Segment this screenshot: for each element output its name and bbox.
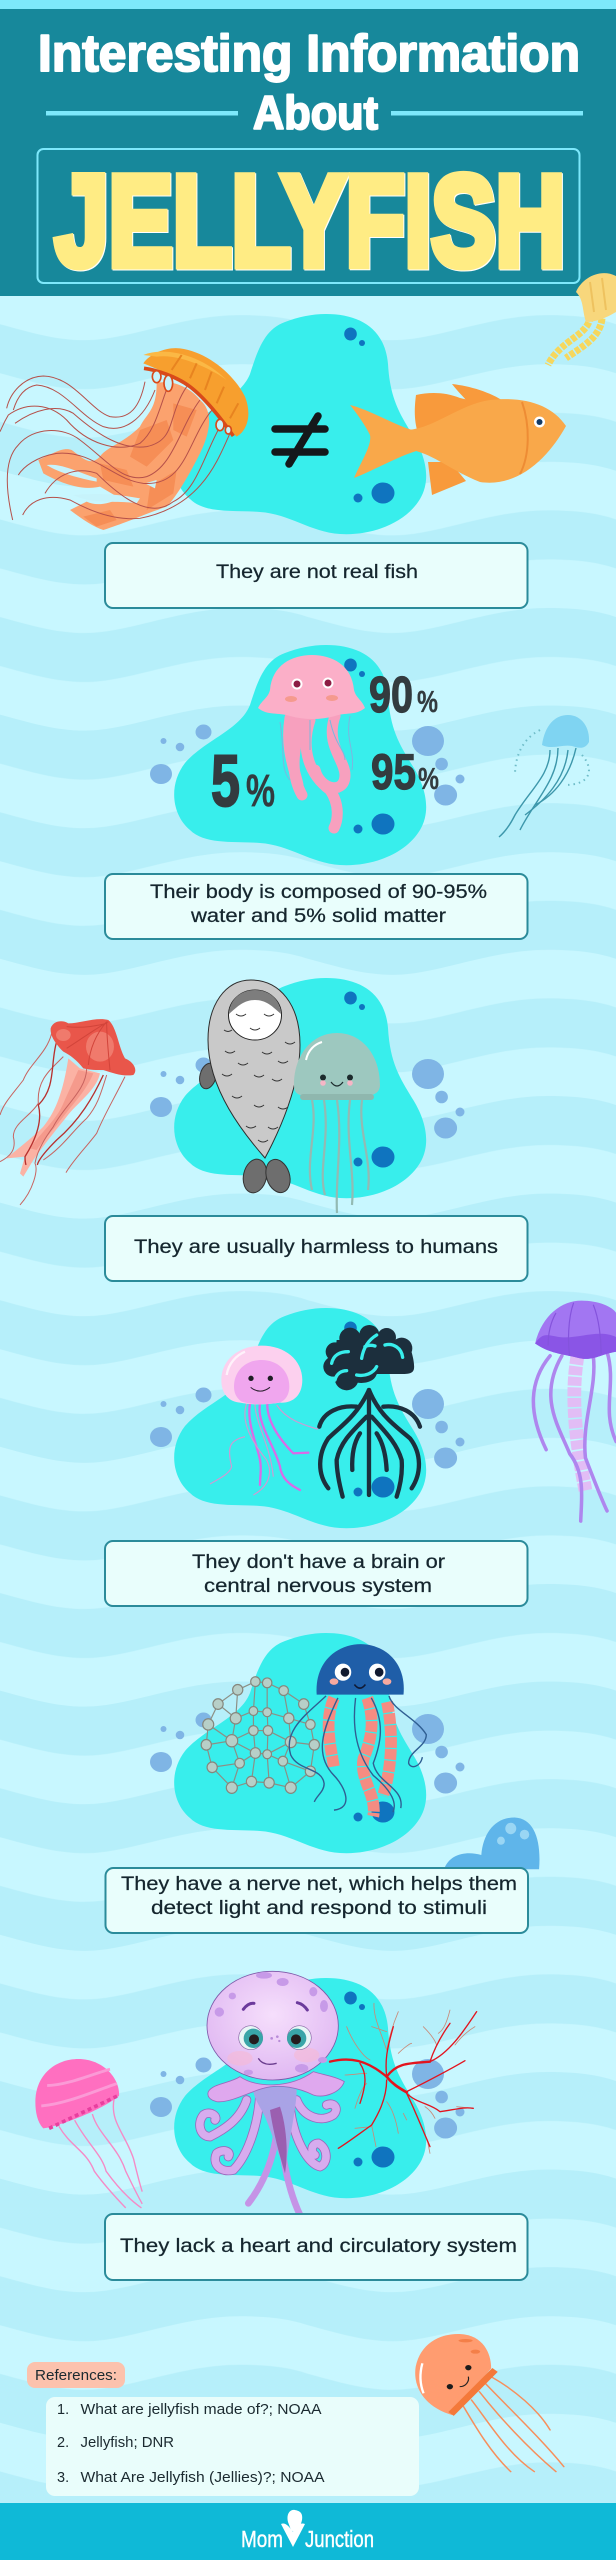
icon: green jellyfish: [294, 1033, 380, 1213]
references: [27, 2362, 419, 2496]
references list: 3.: [57, 2470, 69, 2486]
references list: [46, 2397, 419, 2496]
logo: Mom: [241, 2526, 283, 2552]
logo: [241, 2510, 374, 2552]
icon: brain: [323, 1325, 414, 1390]
references list: What Are Jellyfish (Jellies)?; NOAA: [80, 2470, 325, 2486]
logo: Junction: [305, 2526, 374, 2552]
bubbles light: [150, 724, 464, 806]
stat: 5%: 5: [211, 741, 240, 822]
icon: red blood vessels: [330, 2003, 477, 2153]
caption: [105, 874, 528, 939]
icon: yellow jellyfish: [548, 273, 616, 365]
bubbles light: [150, 1712, 464, 1794]
caption: [105, 1541, 528, 1606]
caption: [105, 2214, 528, 2280]
references tag: References:: [35, 2368, 117, 2384]
panel: nerve net: [106, 1633, 539, 1933]
caption: They lack a heart and circulatory system: [120, 2235, 517, 2257]
backdrop blob: [174, 1308, 426, 1528]
caption: [105, 1216, 528, 1281]
stat: 95%: %: [418, 761, 439, 796]
icon: navy jellyfish: [289, 1644, 426, 1816]
icon: magenta jellyfish: [35, 2059, 142, 2208]
caption: They have a nerve net, which helps them: [121, 1873, 517, 1895]
backdrop blob: [174, 314, 426, 534]
references list: What are jellyfish made of?; NOAA: [80, 2402, 322, 2418]
panel: water composition: [105, 645, 589, 939]
caption: They don't have a brain or: [192, 1551, 446, 1573]
bubbles dark: [344, 1322, 394, 1498]
bubbles dark: [344, 658, 394, 834]
caption: [105, 543, 528, 608]
stat: 90%: %: [417, 684, 438, 719]
footer: [0, 2503, 616, 2560]
stat: 5%: [211, 741, 275, 822]
title line 2 with rules: About: [253, 86, 378, 139]
panel: harmless to humans: [0, 978, 528, 1281]
caption: Their body is composed of 90-95%: [150, 881, 487, 903]
backdrop blob: [174, 978, 426, 1198]
stat: 5%: %: [246, 765, 275, 816]
icon: blue jellyfish partly hidden: [444, 1817, 539, 1869]
bubbles dark: [344, 992, 394, 1168]
icon: nerve net: [201, 1677, 319, 1793]
header banner: [0, 0, 616, 296]
icon: pink jellyfish: [210, 1346, 318, 1495]
caption: They are not real fish: [216, 561, 418, 583]
title box: [38, 149, 580, 283]
stat: 95%: 95: [371, 744, 416, 800]
icon: red jellyfish: [0, 1019, 135, 1205]
icon: pale blue jellyfish: [499, 715, 589, 837]
backdrop blob: [174, 1978, 426, 2198]
references tag: [27, 2362, 125, 2388]
stat: 90%: 90: [369, 666, 413, 723]
caption: [106, 1868, 528, 1933]
icon: orange jellyfish bottom: [415, 2334, 564, 2472]
panel: not real fish: [0, 273, 616, 608]
caption: water and 5% solid matter: [190, 905, 447, 927]
bubbles dark: [344, 1646, 394, 1822]
references list: Jellyfish; DNR: [80, 2435, 174, 2451]
bubbles light: [150, 1058, 464, 1138]
bubbles light: [150, 2058, 464, 2138]
icon: goldfish: [350, 384, 566, 495]
caption: detect light and respond to stimuli: [151, 1897, 487, 1919]
icon: pink jellyfish: [258, 655, 365, 828]
title line 2 with rules: [46, 86, 583, 139]
backdrop blob: [174, 645, 426, 865]
caption: central nervous system: [204, 1575, 432, 1597]
panel: no brain: [105, 1301, 616, 1606]
backdrop blob: [174, 1633, 426, 1853]
icon: not equal sign: [275, 416, 325, 464]
title line 1: Interesting Information: [38, 25, 580, 83]
caption: They are usually harmless to humans: [134, 1236, 498, 1258]
bubbles: [344, 328, 394, 504]
icon: purple jellyfish: [533, 1301, 616, 1521]
panel: no heart: [35, 1971, 528, 2280]
icon: seal baby: [197, 980, 300, 1196]
references list: 1.: [57, 2402, 69, 2418]
bubbles dark: [344, 1992, 394, 2168]
icon: orange jellyfish: [0, 348, 248, 530]
icon: nerves: [319, 1390, 420, 1497]
references list: 2.: [57, 2435, 69, 2451]
icon: lilac jellyfish: [200, 1971, 344, 2215]
bubbles light: [150, 1388, 464, 1468]
